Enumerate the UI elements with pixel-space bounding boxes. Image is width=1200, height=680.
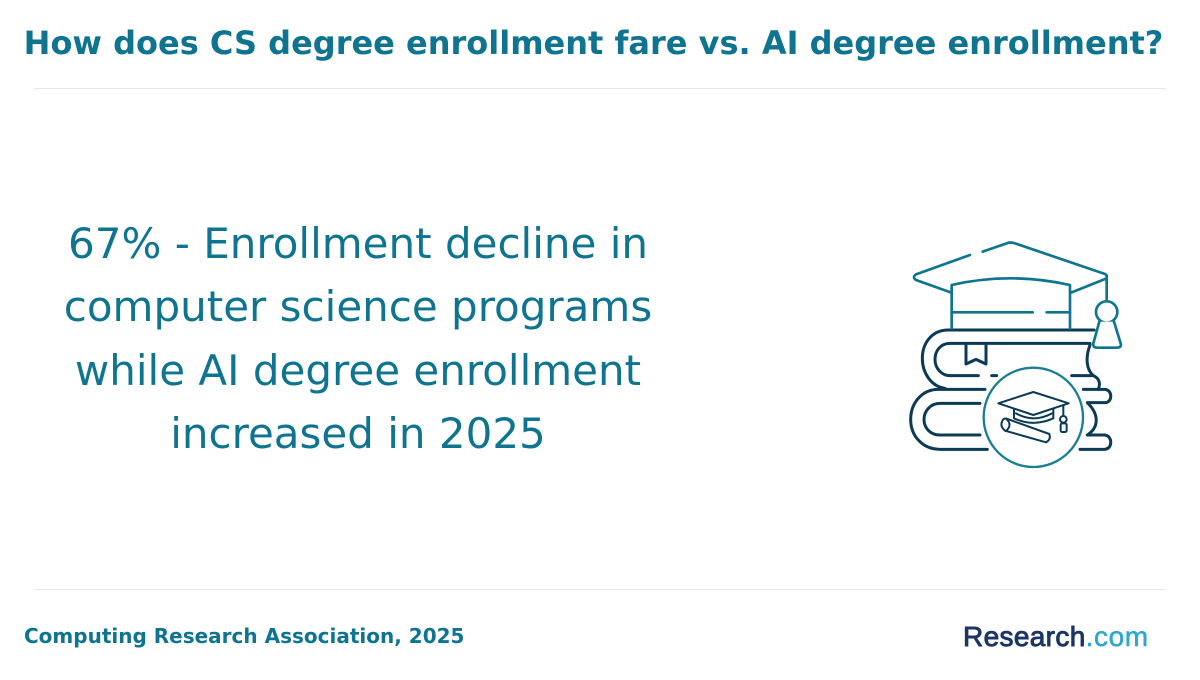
icon part: small cap and diploma — [998, 392, 1069, 442]
icon part: books — [911, 330, 1111, 449]
main statistic text: computer science programs — [64, 282, 652, 331]
main statistic text: 67% - Enrollment decline in — [68, 219, 648, 268]
icon part: mortarboard — [914, 242, 1121, 348]
main statistic text: increased in 2025 — [170, 409, 546, 458]
icon part: circular badge — [984, 368, 1083, 467]
main statistic text — [64, 219, 652, 458]
icon: graduation cap on books — [909, 241, 1122, 468]
source: Computing Research Association, 2025 — [24, 624, 464, 648]
logo: Research.com — [963, 621, 1149, 652]
main statistic text: while AI degree enrollment — [75, 346, 641, 395]
title: How does CS degree enrollment fare vs. AI degree enrollment? — [24, 24, 1163, 62]
